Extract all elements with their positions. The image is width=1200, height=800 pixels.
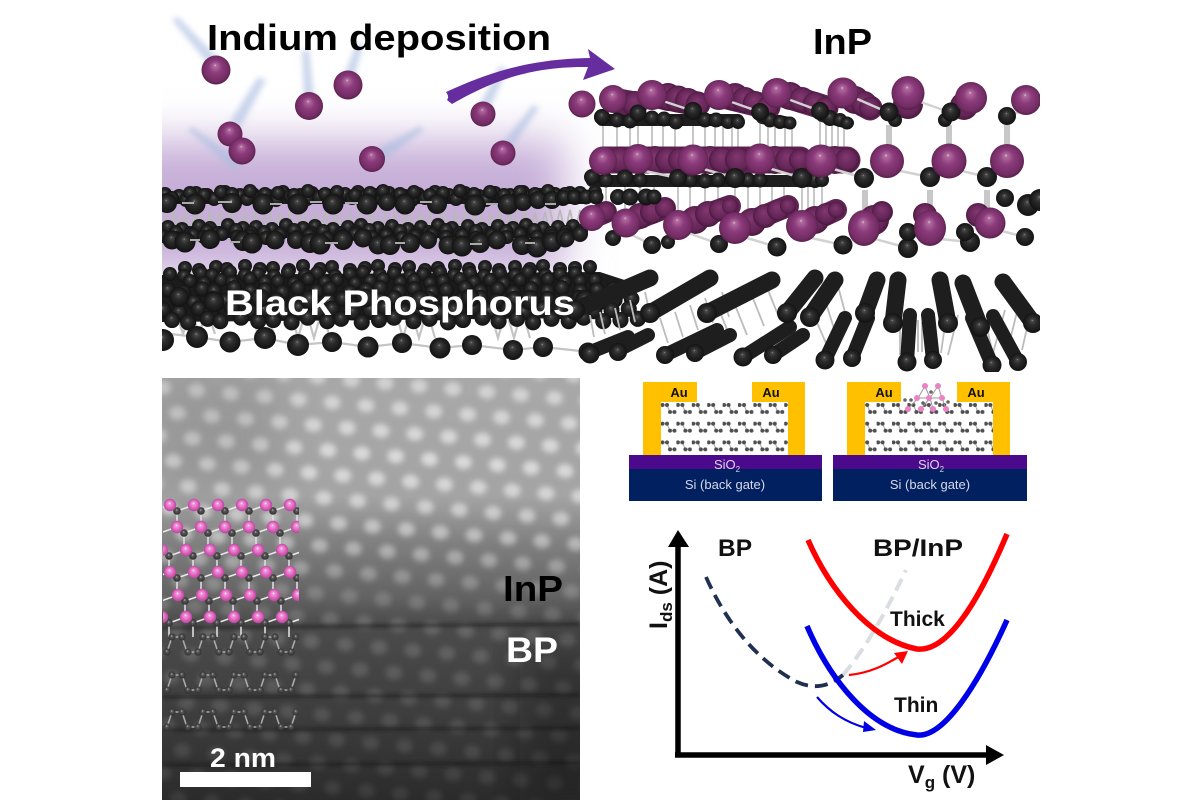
lower black phosphorus layer, left [152,259,646,362]
red arrow [849,651,908,675]
chart: transfer curves: I [645,622,673,629]
blue curve [807,620,1007,735]
dark trailing In rows [592,93,882,228]
device schematic: bare BP [629,382,822,501]
grey dashed curve [843,570,906,675]
device schematic: bare BP: SiO [714,457,736,472]
chart: transfer curves: ds [657,602,676,622]
device schematic: bare BP: Au [670,385,688,400]
device schematic: bare BP: 2 [736,465,741,474]
corner light falloff [150,370,280,490]
indium trails [172,17,539,172]
lower black phosphorus layer, right perspective rows [565,278,1043,374]
label: Indium deposition: Indium deposition [207,17,551,58]
blue arrow [817,697,876,732]
device schematic: BP with InP: Au [875,385,893,400]
dark phosphorus back rows [592,116,848,181]
device schematic: BP with InP: 2 [940,465,945,474]
device schematic: bare BP: Au [762,385,780,400]
chart: transfer curves [645,530,1007,792]
back P atoms [557,109,952,206]
chart: transfer curves: BP/InP [873,535,963,562]
chart: transfer curves: g [925,773,935,792]
device schematic: BP with InP [833,382,1027,501]
panel: STEM micrograph [162,378,580,800]
chart: transfer curves: (V) [935,761,975,789]
BP dashed curve [706,577,843,686]
InP crystal [557,76,1051,258]
horizontal bonds [626,98,1026,248]
chart: transfer curves: Thick [890,608,945,631]
panel: deposition scene [110,17,1051,374]
red curve [808,534,1007,649]
label: BP on micrograph: BP [506,631,558,670]
chart labels: BP [718,535,752,562]
purple indium vapour glow [110,140,565,275]
chart: transfer curves: Thin [894,694,938,717]
indium atoms falling [202,56,516,172]
device schematic: bare BP: Si (back gate) [685,477,765,492]
dark BP van der Waals bands [162,624,580,765]
atomic model inset [163,498,299,730]
axes [668,530,1004,765]
scale bar: 2 nm [210,743,276,773]
chart: transfer curves: V [908,761,925,789]
vertical bonds [603,120,844,210]
front In and P atoms [594,102,1016,125]
label: Black Phosphorus: Black Phosphorus [225,284,575,323]
chart: transfer curves: (A) [645,561,673,602]
device schematic: BP with InP: Si (back gate) [890,477,970,492]
lattice spots [162,378,580,800]
upper black phosphorus layer [155,184,602,258]
label: InP: InP [813,21,872,62]
device schematic: BP with InP: SiO [918,457,940,472]
InP nanocluster [903,383,950,412]
scale bar [180,748,311,787]
label: InP on micrograph: InP [503,568,563,609]
device schematic: BP with InP: Au [967,385,985,400]
process arrow [446,49,615,104]
